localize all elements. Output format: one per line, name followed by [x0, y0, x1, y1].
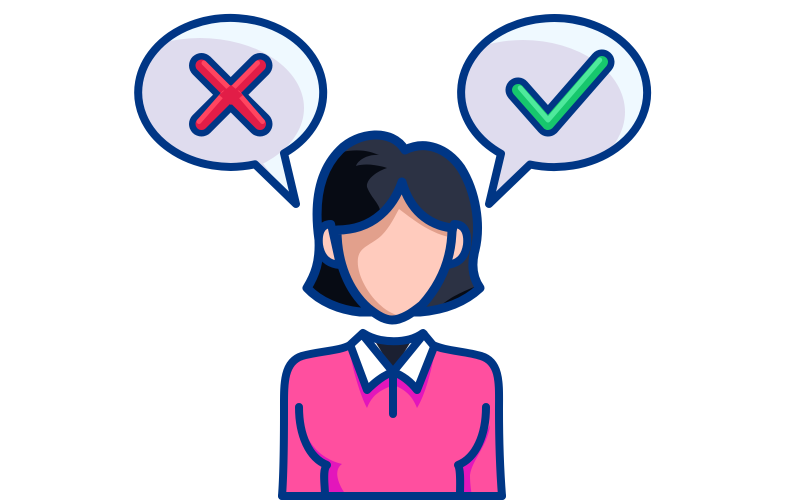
left ear [319, 224, 340, 265]
hair [300, 135, 485, 315]
right ear [446, 224, 467, 265]
icon: red cross [199, 63, 262, 124]
icon: green check mark [518, 60, 602, 124]
illustration: person deciding between wrong and right [134, 14, 652, 500]
person [282, 135, 502, 496]
right speech bubble with check mark [457, 14, 652, 208]
sweater shadows [351, 358, 434, 408]
left speech bubble with cross [134, 14, 328, 208]
collar and neck [370, 342, 416, 370]
face [337, 182, 460, 330]
sweater [282, 333, 502, 496]
